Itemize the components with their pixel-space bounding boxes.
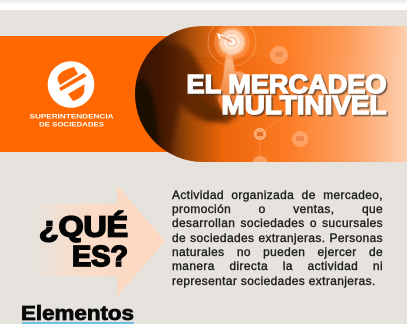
hero photo pill: [135, 26, 407, 162]
title shadow: EL MERCADEO: [188, 70, 388, 100]
definition text: representar sociedades extranjeras.: [172, 274, 376, 288]
top white band: [0, 0, 407, 10]
heading: ¿QUÉ ES?: ¿QUÉ: [39, 212, 128, 244]
heading: ¿QUÉ ES?: ES?: [72, 241, 128, 273]
definition text: de sociedades extranjeras. Personas: [172, 231, 383, 245]
heading: ¿QUÉ ES?: [39, 212, 128, 273]
logo: Superintendencia de Sociedades: DE SOCIEDADES: [39, 122, 104, 128]
floating laptop icon: [292, 131, 308, 147]
definition text: Actividad organizada de mercadeo,: [172, 188, 383, 202]
logo emblem: [48, 61, 94, 108]
title shadow: MULTINIVEL: [223, 92, 388, 122]
title shadow: [188, 70, 388, 122]
pointing finger and hand: [218, 54, 249, 114]
definition text: [172, 188, 383, 288]
target icon: [208, 26, 256, 66]
logo: Superintendencia de Sociedades: [30, 61, 114, 129]
subheading underline: [22, 322, 134, 324]
definition text: manera directa la actividad ni: [172, 259, 383, 273]
floating cart icon: [270, 46, 288, 64]
title line 2: MULTINIVEL: [222, 90, 387, 120]
floating lower icon: [252, 156, 268, 162]
floating monitor icon: [254, 128, 266, 140]
businessman silhouette: [135, 43, 238, 162]
definition text: promoción o ventas, que: [172, 202, 383, 216]
definition text: naturales no pueden ejercer de: [172, 245, 383, 259]
title line 1: EL MERCADEO: [186, 69, 386, 99]
arrow callout: [30, 185, 165, 297]
title: [186, 69, 388, 122]
orange banner: [0, 36, 180, 152]
logo wordmark: SUPERINTENDENCIA: [30, 113, 114, 120]
definition text: desarrollan sociedades o sucursales: [172, 216, 383, 230]
